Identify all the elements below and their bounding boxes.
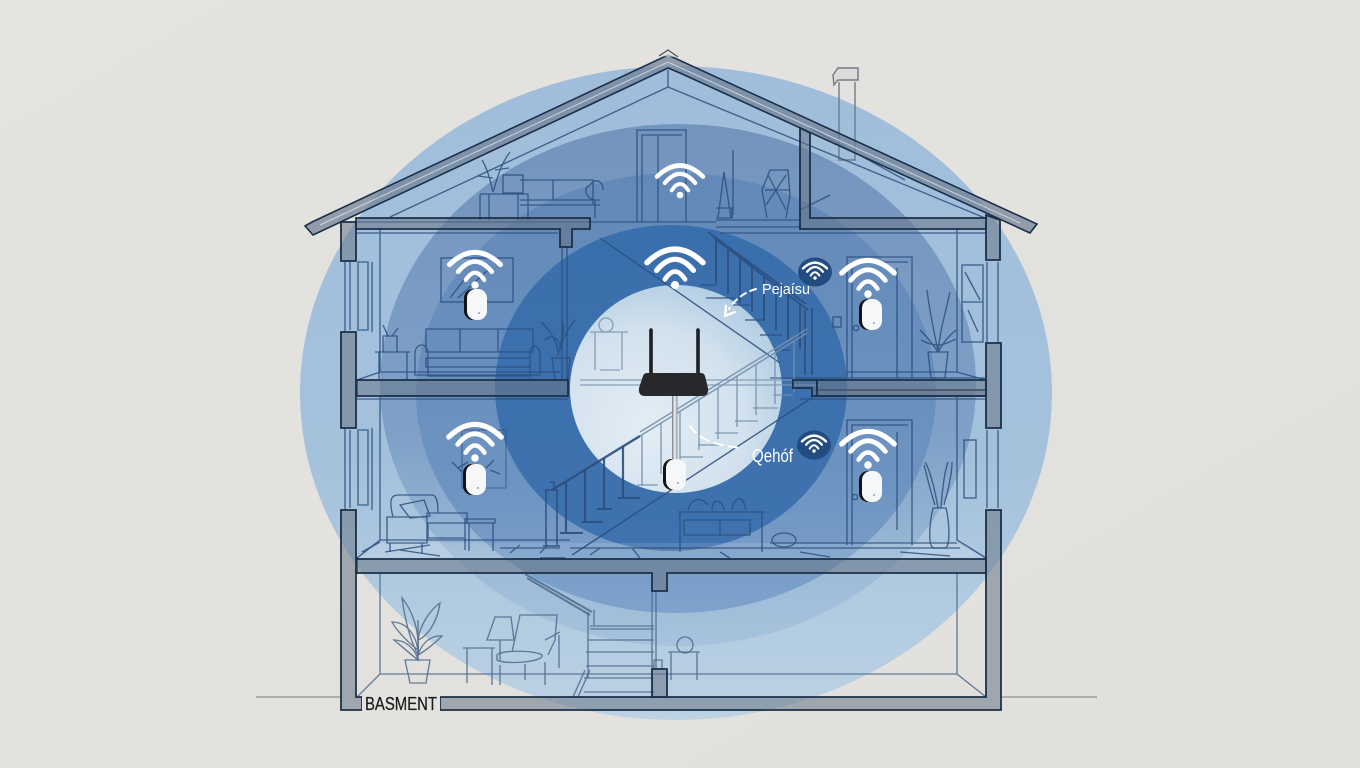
extender upper left	[464, 289, 487, 320]
icon: wifi attic	[657, 166, 703, 198]
exterior walls	[341, 222, 362, 710]
house structure: walls and floors	[305, 50, 1037, 710]
extenders	[463, 289, 882, 502]
first floor slab	[356, 380, 568, 396]
coverage rings	[300, 66, 1052, 720]
central extender	[663, 459, 686, 490]
label: upper: Pejaísu	[762, 281, 810, 298]
upper ceiling slab	[356, 218, 590, 247]
ring: third coverage	[416, 173, 936, 613]
ground floor slab	[356, 559, 986, 591]
extender lower left	[463, 464, 486, 495]
label: lower: Qehóf	[752, 446, 794, 466]
chimney	[833, 68, 858, 160]
arrow: upper dashed	[725, 289, 756, 316]
extender lower right	[859, 471, 882, 502]
router body	[639, 373, 708, 396]
roof	[305, 50, 1037, 235]
ground line	[256, 696, 1097, 698]
badge wifi upper	[798, 258, 832, 286]
icon: wifi lower left	[449, 424, 501, 462]
badge wifi lower	[797, 430, 831, 460]
basement furniture	[357, 573, 986, 697]
room one right furniture	[570, 396, 998, 558]
ring: core coverage	[570, 285, 782, 493]
ring: second coverage	[380, 124, 976, 646]
extender upper right	[859, 299, 882, 330]
wifi icons	[449, 166, 894, 469]
floor band tint	[357, 543, 986, 558]
room two right furniture	[720, 229, 998, 380]
icon: wifi upper left	[450, 252, 500, 289]
router with pole and extender	[639, 330, 708, 490]
antennas	[651, 330, 698, 376]
basement label: BASMENT	[365, 694, 437, 714]
interior linework	[345, 70, 998, 697]
room one left furniture	[345, 396, 570, 558]
icon: wifi upper right	[842, 260, 894, 298]
icon: wifi stairs	[647, 249, 703, 289]
basement partition	[652, 669, 667, 697]
room two left furniture	[345, 229, 575, 380]
signal text and arrows	[690, 258, 832, 466]
icon: wifi lower right	[842, 431, 894, 469]
connecting pole	[672, 395, 678, 461]
arrow: lower dashed	[690, 426, 742, 448]
central stairs	[540, 232, 820, 558]
ring: strong coverage	[495, 225, 847, 551]
ring: outermost coverage	[300, 66, 1052, 720]
attic furniture	[357, 70, 985, 227]
